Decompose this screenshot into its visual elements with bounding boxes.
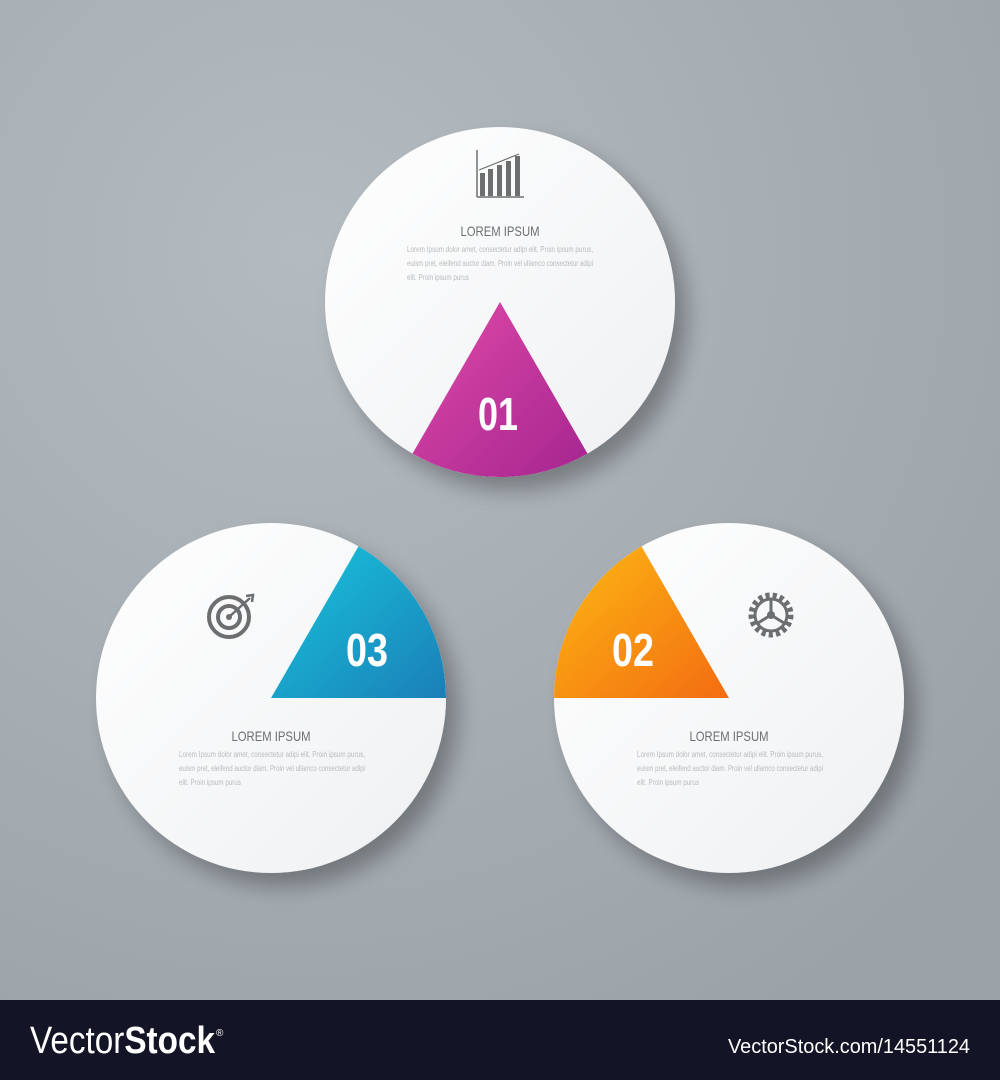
heading: step 01: LOREM IPSUM xyxy=(460,223,540,239)
footer bar xyxy=(0,1000,1000,1080)
panel: step 02 circle xyxy=(554,523,904,873)
panel: step 01 circle xyxy=(325,127,675,477)
text block: step 02 xyxy=(637,749,823,787)
text block: step 01: Lorem Ipsum dolor amet, consectetur adipi elit. Proin ipsum purus, xyxy=(407,244,593,254)
number: 02: 02 xyxy=(612,624,654,676)
text block: step 03: euism pret, eleifend auctor diam. Proin vel ullamco consectetur adipi xyxy=(179,763,365,773)
footer logo: VectorStock xyxy=(30,1020,216,1062)
footer url: VectorStock.com/14551124 xyxy=(728,1036,970,1058)
icon: gear xyxy=(752,596,790,634)
text block: step 01 xyxy=(407,244,593,282)
number: 03: 03 xyxy=(346,624,388,676)
text block: step 01: elit. Proin ipsum purus xyxy=(407,272,469,282)
sector: 03 xyxy=(271,546,446,698)
footer bar: ® xyxy=(216,1028,224,1039)
number: 01: 01 xyxy=(478,388,518,440)
icon: target xyxy=(209,595,253,637)
sector: 02 xyxy=(554,546,729,698)
text block: step 01: euism pret, eleifend auctor diam. Proin vel ullamco consectetur adipi xyxy=(407,258,593,268)
text block: step 03 xyxy=(179,749,365,787)
heading: step 03: LOREM IPSUM xyxy=(232,728,310,744)
panel: step 03 circle xyxy=(96,523,446,873)
sector: 01 xyxy=(412,302,588,477)
heading: step 02: LOREM IPSUM xyxy=(690,728,768,744)
text block: step 02: Lorem Ipsum dolor amet, consectetur adipi elit. Proin ipsum purus, xyxy=(637,749,823,759)
icon: bar chart xyxy=(477,150,524,197)
text block: step 03: Lorem Ipsum dolor amet, consectetur adipi elit. Proin ipsum purus, xyxy=(179,749,365,759)
text block: step 02: euism pret, eleifend auctor diam. Proin vel ullamco consectetur adipi xyxy=(637,763,823,773)
text block: step 02: elit. Proin ipsum purus xyxy=(637,777,699,787)
text block: step 03: elit. Proin ipsum purus xyxy=(179,777,241,787)
